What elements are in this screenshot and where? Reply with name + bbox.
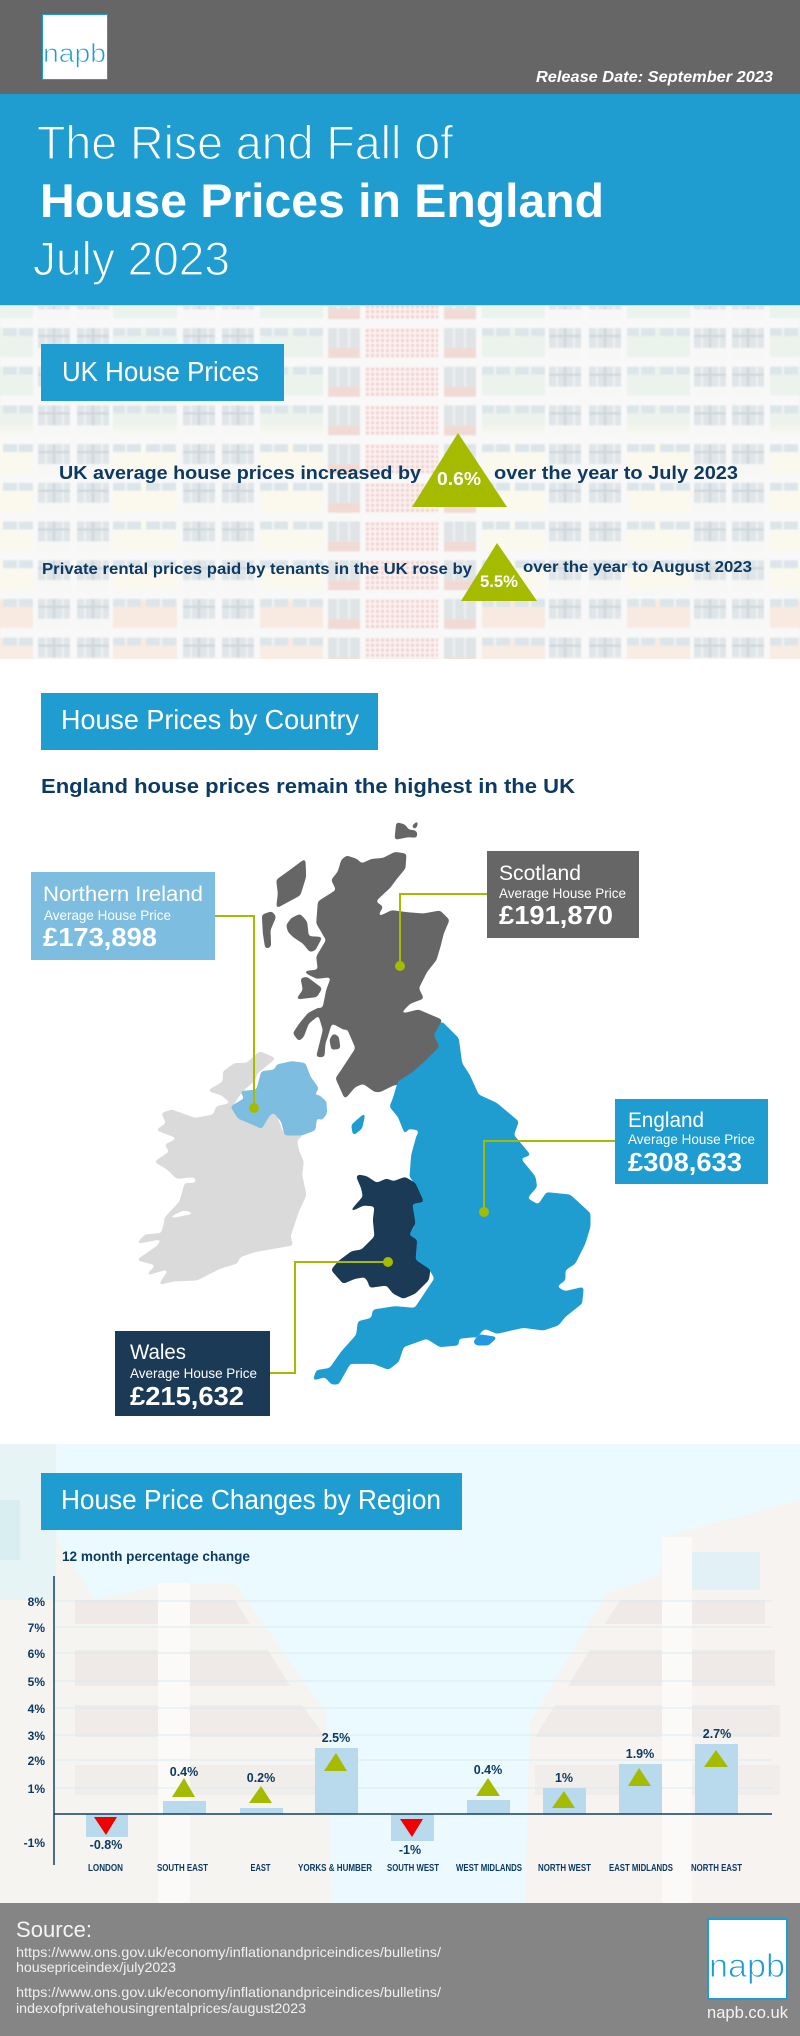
statement: house prices increase: over the year to July 2023 [494,462,738,483]
statement: house prices increase: UK average house prices increased by [59,462,422,483]
bar: South East [157,1765,208,1874]
bar: Yorks and Humber: 2.5% [322,1731,350,1745]
map: England [313,1022,590,1384]
callout: Wales [115,1257,393,1416]
heading: UK House Prices: UK House Prices [62,356,259,387]
heading: House Price Changes by Region: House Price Changes by Region [61,1484,441,1515]
icon: up triangle 5.5% [461,543,537,601]
callout: England [479,1099,768,1217]
logo: napb [42,14,108,80]
title banner [0,94,800,305]
bar: West Midlands: WEST MIDLANDS [456,1862,522,1874]
callout: Northern Ireland [31,872,259,1113]
callout: Scotland: Scotland [499,862,581,885]
callout: England: Average House Price [628,1131,755,1147]
source links: indexofprivatehousingrentalprices/august2023 [16,2000,306,2016]
bar: South East: SOUTH EAST [157,1862,208,1874]
icon: up triangle 0.6%: 0.6% [437,469,481,489]
source links: https://www.ons.gov.uk/economy/inflationandpriceindices/bulletins/ [16,1984,441,2000]
icon: up triangle 5.5%: 5.5% [480,572,518,591]
heading: House Prices by Country [41,693,378,750]
callout: Scotland: Average House Price [499,885,626,901]
y axis labels: 1% [28,1782,45,1796]
heading: House Price Changes by Region [41,1473,462,1530]
map: Wales [332,1175,430,1298]
panel: house prices by country [0,659,800,1444]
bar: North East: NORTH EAST [691,1862,742,1874]
logo: napb footer [707,1919,788,2022]
bar: East [240,1771,283,1874]
background: apartment towers [0,1444,800,1903]
bar: East: 0.2% [247,1771,275,1785]
bar: Yorks and Humber: YORKS & HUMBER [298,1862,372,1874]
panel: house price changes by region [0,1444,800,1903]
bar: North East [691,1727,742,1874]
title banner: July 2023 [33,232,230,285]
callout: Northern Ireland: £173,898 [43,922,157,952]
y axis labels: 2% [28,1754,45,1768]
title banner: The Rise and Fall of [37,116,454,169]
icon: up triangle 0.6% [412,433,507,507]
bar chart: regional change [24,1576,772,1874]
bar: Yorks and Humber [298,1731,372,1874]
callout: Northern Ireland: Average House Price [44,907,171,923]
y axis labels: 5% [28,1675,45,1689]
y axis labels: 4% [28,1702,45,1716]
statement: house prices increase [59,433,738,507]
panel: footer sources [0,1903,800,2036]
bar: South East: 0.4% [170,1765,198,1779]
panel: UK house prices [0,305,800,659]
bar: North West: 1% [555,1771,573,1785]
bar: East Midlands: EAST MIDLANDS [609,1862,673,1874]
bar: North West [538,1771,591,1874]
heading: House Prices by Country: House Prices by Country [61,704,359,735]
callout: England: £308,633 [628,1147,742,1177]
logo: napb footer: napb [709,1947,785,1984]
y axis labels [24,1595,45,1850]
release date: Release Date: September 2023 [536,69,773,86]
logo: napb footer: napb.co.uk [707,2003,788,2022]
source links: housepriceindex/july2023 [16,1959,176,1975]
callout: Scotland: £191,870 [499,900,613,930]
statement: rental prices rise: over the year to August 2023 [523,559,752,576]
statement: rental prices rise [42,543,752,601]
heading: UK House Prices [41,344,284,401]
bar: London: LONDON [88,1862,123,1874]
y axis labels: 6% [28,1647,45,1661]
bar: East Midlands [609,1747,673,1874]
y axis labels: 8% [28,1595,45,1609]
bar: West Midlands [456,1763,522,1874]
statement: rental prices rise: Private rental prices paid by tenants in the UK rose by [42,561,472,578]
bar: North West: NORTH WEST [538,1862,591,1874]
source links [16,1944,441,2016]
map: Northern Ireland [231,1062,327,1135]
chart subtitle: 12 month percentage change [62,1549,250,1564]
bar: South West: SOUTH WEST [387,1862,439,1874]
bar: South West: -1% [399,1843,421,1857]
callout: Wales: Average House Price [130,1365,257,1381]
map: Scotland [262,821,449,1098]
bar: South West [387,1814,439,1874]
bar: London: -0.8% [90,1838,122,1852]
source links: https://www.ons.gov.uk/economy/inflationandpriceindices/bulletins/ [16,1944,441,1960]
source heading: Source: [16,1917,92,1942]
bar: East Midlands: 1.9% [626,1747,654,1761]
y axis labels: 7% [28,1621,45,1635]
callout: Scotland [395,851,639,971]
bar: East: EAST [250,1862,271,1874]
bar: North East: 2.7% [703,1727,731,1741]
title banner: House Prices in England [40,174,604,227]
callout: Wales: £215,632 [130,1381,244,1411]
map: Ireland [137,1052,306,1284]
logo: napb: napb [43,38,106,68]
callout: England: England [628,1109,704,1132]
panel: page header bar [0,0,800,94]
bar: West Midlands: 0.4% [474,1763,502,1777]
bar: London [86,1814,128,1874]
y axis labels: 3% [28,1729,45,1743]
callout: Wales: Wales [130,1341,186,1364]
subheading: England highest: England house prices remain the highest in the UK [41,775,575,798]
callout: Northern Ireland: Northern Ireland [43,883,203,906]
y axis labels: -1% [24,1836,45,1850]
